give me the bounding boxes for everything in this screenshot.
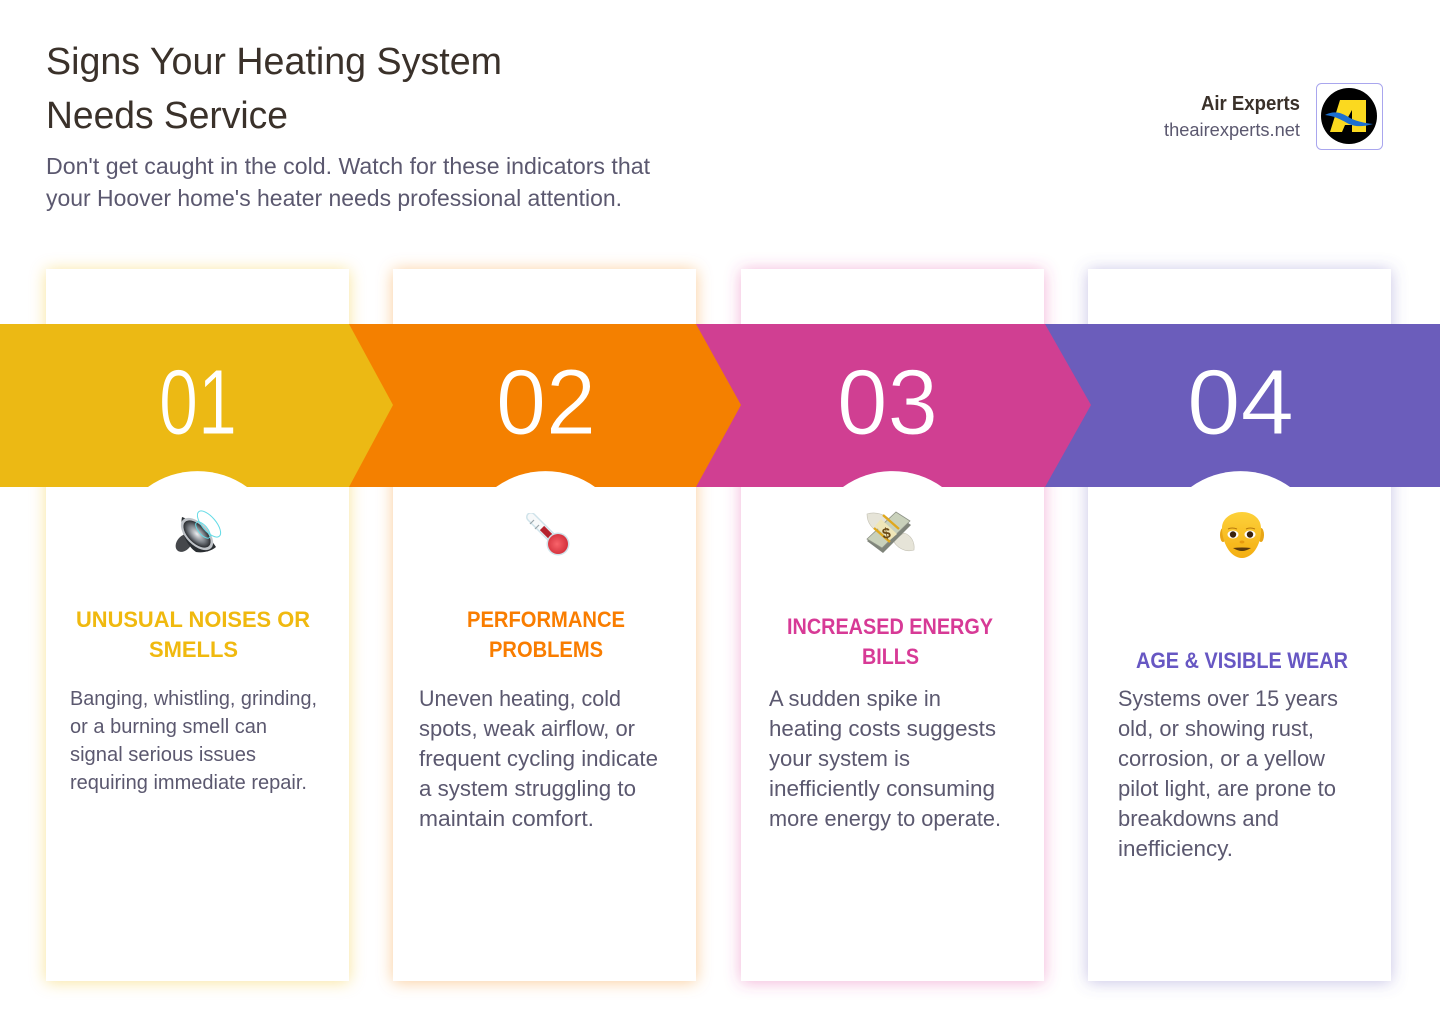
body text: card 2: maintain comfort. bbox=[419, 806, 594, 831]
body text: card 4: Systems over 15 years bbox=[1118, 686, 1338, 711]
body text: card 2 bbox=[419, 686, 658, 831]
body text: card 3: inefficiently consuming bbox=[769, 776, 995, 801]
title: Signs Your Heating System bbox=[46, 41, 502, 83]
panel: card 2 performance problems bbox=[393, 269, 696, 981]
heading: card 1: SMELLS bbox=[149, 637, 238, 662]
body text: card 2: frequent cycling indicate bbox=[419, 746, 658, 771]
panel: card 1 unusual noises or smells bbox=[46, 269, 349, 981]
body text: card 2: Uneven heating, cold bbox=[419, 686, 621, 711]
heading: card 3 bbox=[787, 614, 993, 669]
body text: card 1: signal serious issues bbox=[70, 744, 256, 766]
heading: card 3: BILLS bbox=[862, 644, 919, 669]
chevron ribbon bbox=[0, 324, 1440, 487]
heading: card 1: UNUSUAL NOISES OR bbox=[76, 607, 310, 632]
heading: card 4: AGE & VISIBLE WEAR bbox=[1136, 648, 1348, 673]
body text: card 3: A sudden spike in bbox=[769, 686, 941, 711]
number 04: 04 bbox=[1187, 350, 1294, 454]
body text: card 2: spots, weak airflow, or bbox=[419, 716, 635, 741]
heading: card 2: PROBLEMS bbox=[489, 637, 603, 662]
body text: card 4: old, or showing rust, bbox=[1118, 716, 1314, 741]
body text: card 2: a system struggling to bbox=[419, 776, 636, 801]
heading: card 2: PERFORMANCE bbox=[467, 607, 625, 632]
body text: card 3 bbox=[769, 686, 1001, 831]
body text: card 1: requiring immediate repair. bbox=[70, 772, 307, 794]
body text: card 3: heating costs suggests bbox=[769, 716, 996, 741]
panel: card 4 age and visible wear bbox=[1088, 269, 1391, 981]
panel: card 3 increased energy bills bbox=[741, 269, 1044, 981]
title bbox=[46, 41, 502, 137]
icon: money with wings: $ bbox=[881, 525, 893, 543]
subtitle bbox=[46, 153, 650, 211]
number 03: 03 bbox=[837, 350, 938, 454]
body text: card 1: or a burning smell can bbox=[70, 716, 267, 738]
subtitle: your Hoover home's heater needs professional attention. bbox=[46, 185, 622, 211]
body text: card 3: more energy to operate. bbox=[769, 806, 1001, 831]
body text: card 4: inefficiency. bbox=[1118, 836, 1233, 861]
heading: card 3: INCREASED ENERGY bbox=[787, 614, 993, 639]
white arc notches bbox=[148, 471, 1290, 487]
icon: money with wings bbox=[867, 512, 914, 553]
body text: card 3: your system is bbox=[769, 746, 910, 771]
subtitle: Don't get caught in the cold. Watch for these indicators that bbox=[46, 153, 650, 179]
body text: card 4: pilot light, are prone to bbox=[1118, 776, 1336, 801]
logo bbox=[1316, 84, 1382, 150]
body text: card 1: Banging, whistling, grinding, bbox=[70, 688, 317, 710]
number 02: 02 bbox=[496, 350, 596, 454]
brand name and website: Air Experts bbox=[1201, 93, 1300, 115]
icon: old man face bbox=[1220, 512, 1264, 558]
number 01: 01 bbox=[159, 350, 237, 454]
icon: thermometer bbox=[530, 517, 570, 556]
heading: card 1 bbox=[76, 607, 310, 662]
body text: card 4 bbox=[1118, 686, 1338, 861]
heading: card 2 bbox=[467, 607, 625, 662]
body text: card 1 bbox=[70, 688, 317, 794]
icon: speaker bbox=[172, 507, 225, 556]
brand name and website bbox=[1164, 93, 1300, 140]
title: Needs Service bbox=[46, 95, 288, 137]
brand name and website: theairexperts.net bbox=[1164, 120, 1300, 140]
body text: card 4: corrosion, or a yellow bbox=[1118, 746, 1325, 771]
body text: card 4: breakdowns and bbox=[1118, 806, 1279, 831]
